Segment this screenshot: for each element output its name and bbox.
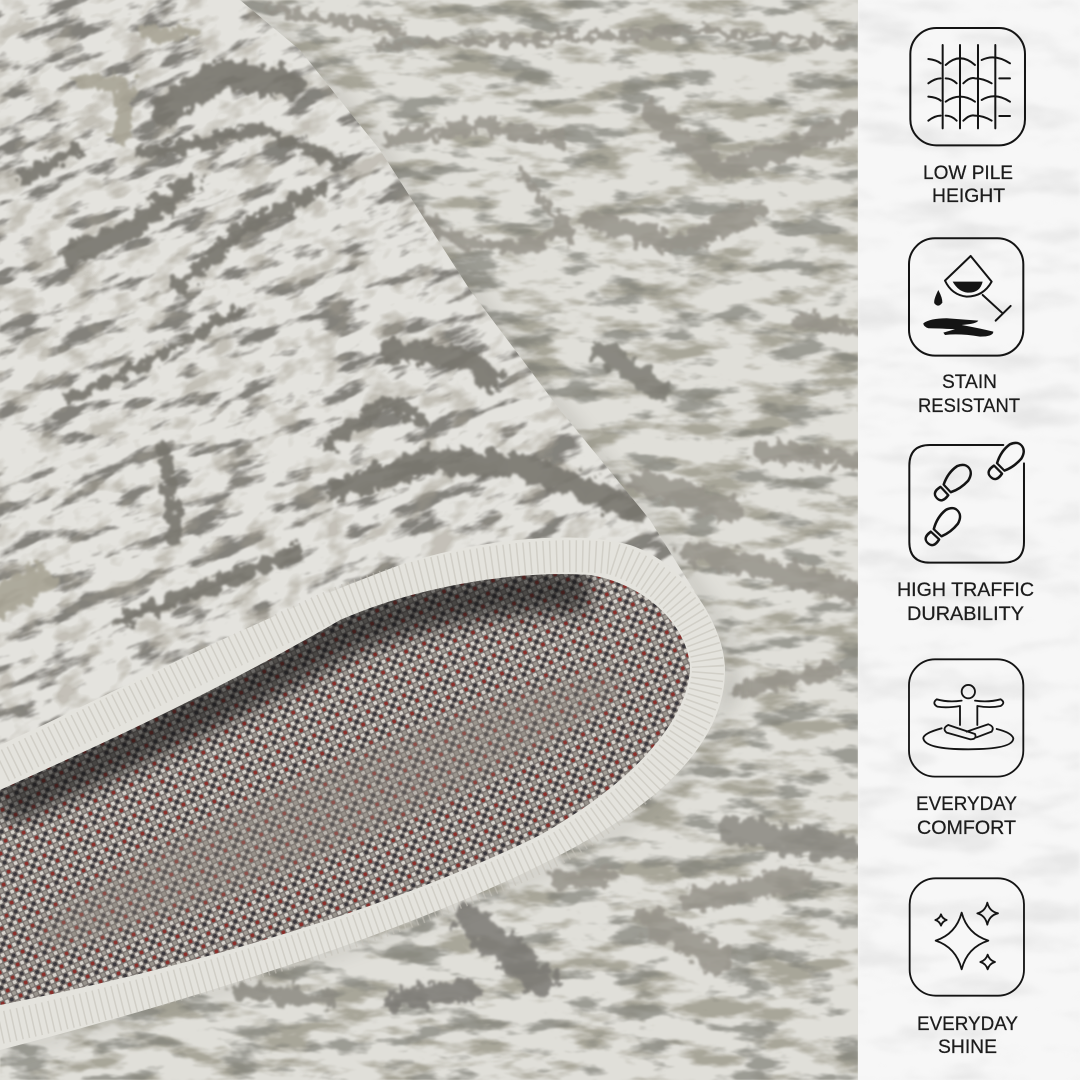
label: stain resistant — [918, 372, 1020, 417]
side feature panel — [858, 0, 1080, 1080]
flat rug background — [0, 0, 858, 1080]
label: high traffic durability: DURABILITY — [907, 604, 1024, 625]
rug backing weave — [0, 560, 700, 1020]
label: everyday shine — [917, 1014, 1018, 1058]
icon: footprints — [909, 439, 1028, 563]
icon: seated figure on mat — [909, 659, 1023, 777]
label: everyday comfort — [916, 794, 1017, 839]
label: everyday shine: EVERYDAY — [917, 1014, 1018, 1035]
label: low pile height: HEIGHT — [932, 186, 1005, 207]
label: high traffic durability: HIGH TRAFFIC — [897, 580, 1034, 601]
feature: everyday shine — [910, 878, 1024, 1058]
icon: pile fibres — [910, 28, 1025, 145]
feature: high traffic durability — [897, 439, 1034, 625]
rolled rug surface — [0, 0, 700, 745]
rug photo — [0, 0, 858, 1080]
feature: stain resistant — [909, 238, 1023, 417]
label: everyday comfort: COMFORT — [917, 818, 1016, 839]
feature: low pile height — [910, 28, 1025, 207]
feature: everyday comfort — [909, 659, 1023, 839]
icon: spilled wine glass — [909, 238, 1023, 356]
label: everyday comfort: EVERYDAY — [916, 794, 1017, 815]
label: low pile height — [923, 163, 1013, 207]
label: stain resistant: STAIN — [942, 372, 997, 393]
rug binding edge — [0, 538, 725, 1050]
label: stain resistant: RESISTANT — [918, 396, 1020, 417]
label: high traffic durability — [897, 580, 1034, 625]
label: low pile height: LOW PILE — [923, 163, 1013, 184]
label: everyday shine: SHINE — [938, 1037, 997, 1058]
icon: sparkles — [910, 878, 1024, 996]
